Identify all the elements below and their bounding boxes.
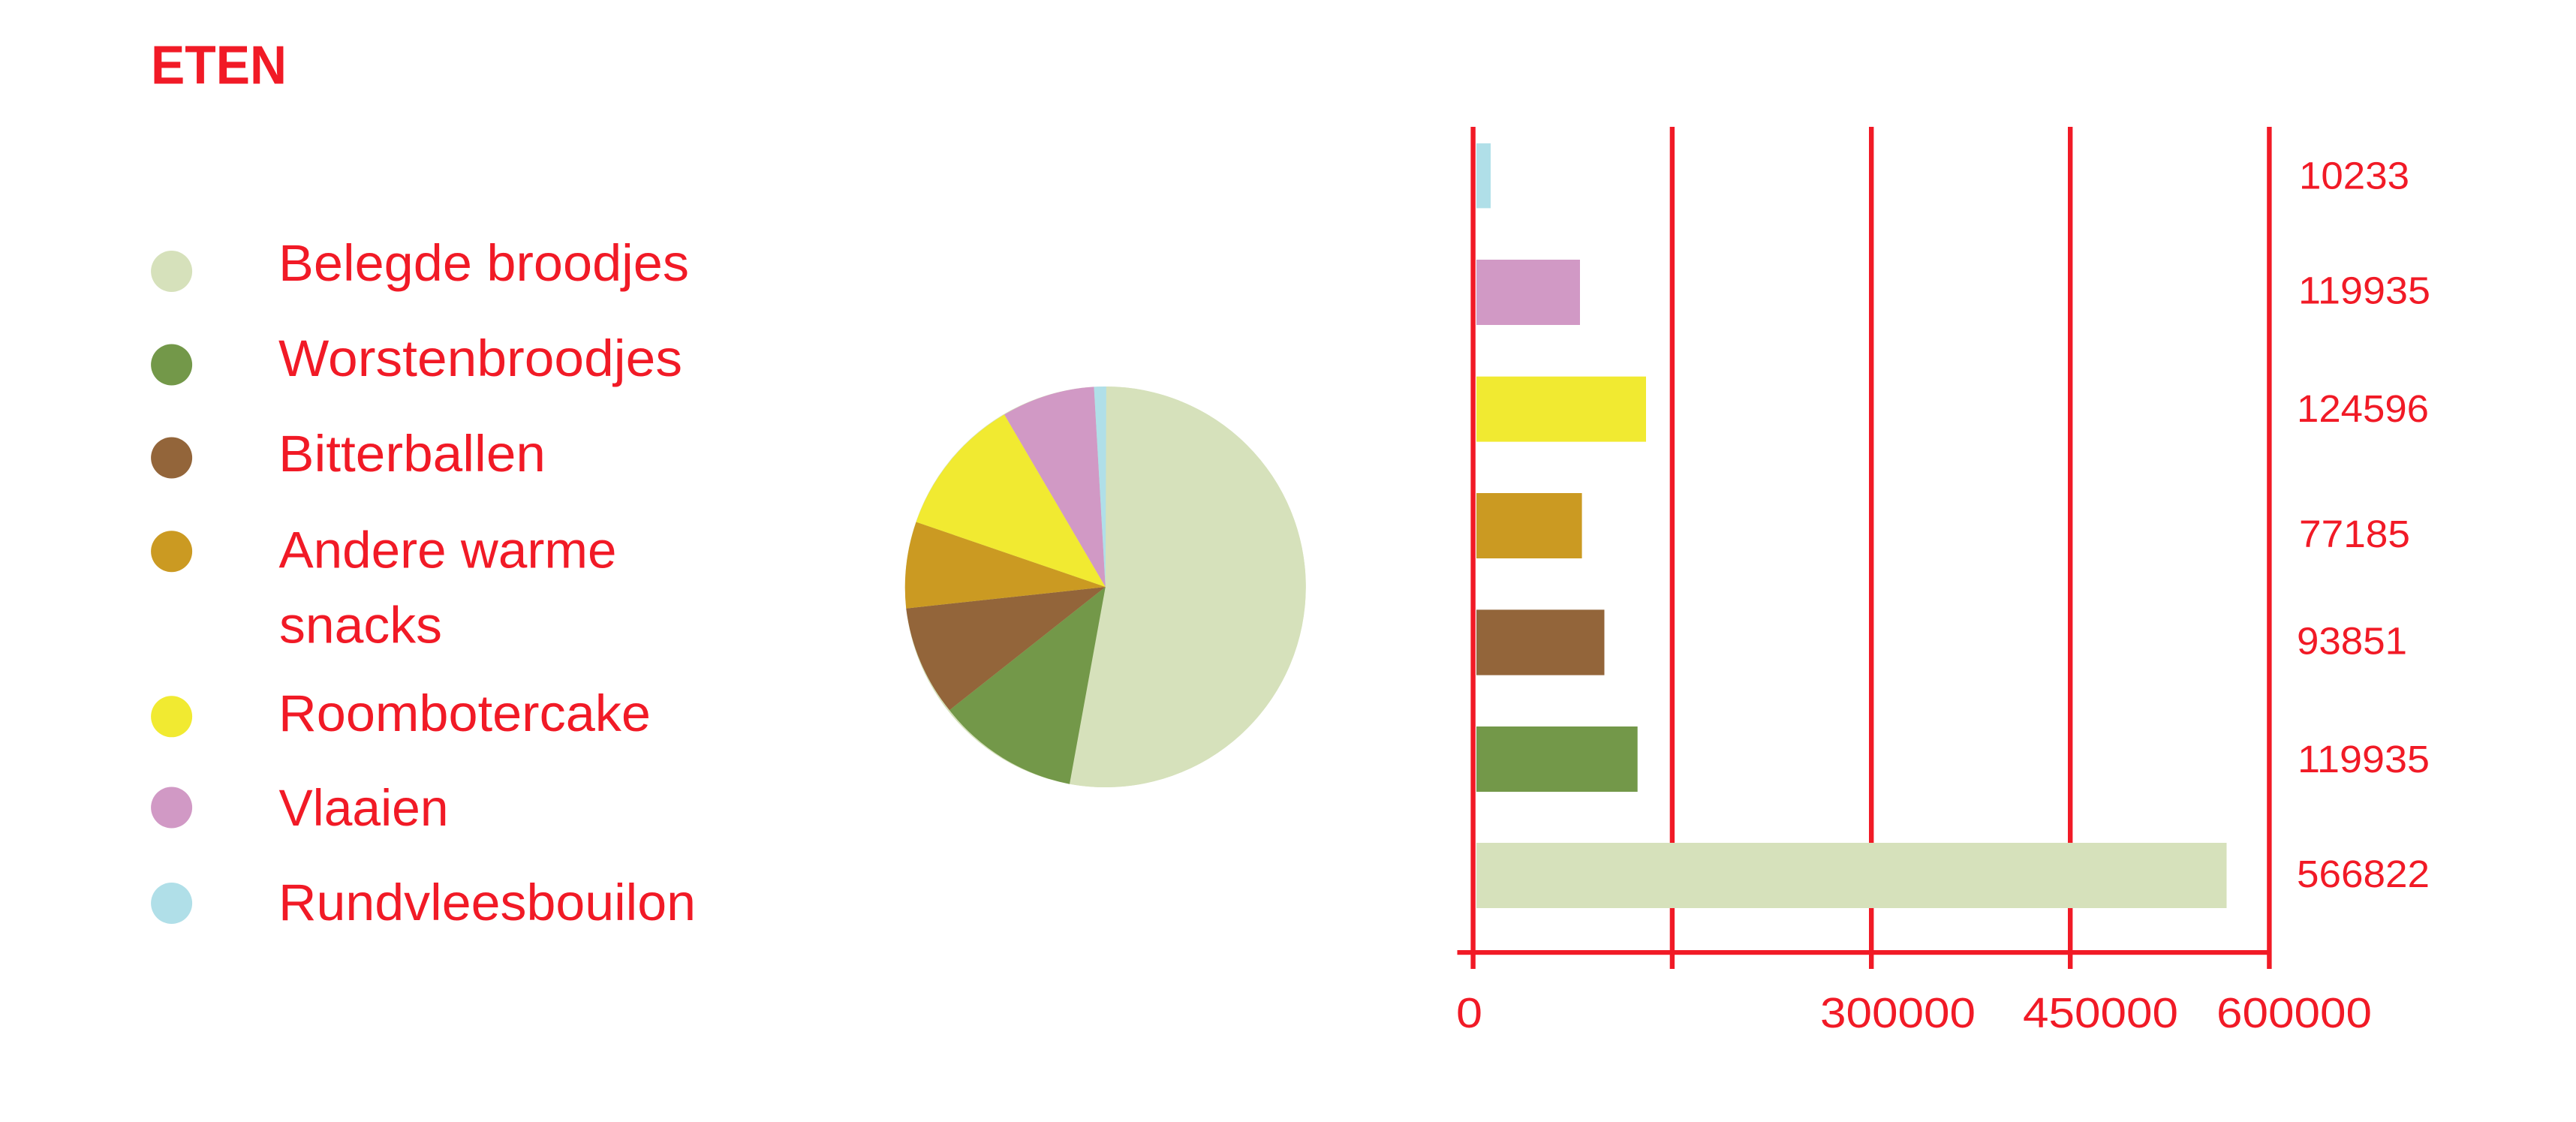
chart grid and axes [1458, 127, 2272, 969]
bar: Rundvleesbouilon [1476, 143, 1491, 208]
bar: Roombotercake [1476, 377, 1646, 442]
legend item: Vlaaien [151, 779, 449, 837]
legend item: Roombotercake: Roombotercake [278, 684, 651, 742]
bar value labels: 10233 [2299, 154, 2409, 197]
x-axis labels: 600000 [2216, 989, 2372, 1037]
bar value labels: 77185 [2299, 513, 2410, 555]
x-axis labels: 300000 [1820, 989, 1976, 1037]
legend item: Bitterballen: Bitterballen [278, 425, 546, 483]
bar value labels: 124596 [2297, 387, 2429, 430]
bar value labels: 566822 [2297, 853, 2430, 895]
legend item: Worstenbroodjes: Worstenbroodjes [278, 329, 682, 387]
bar: Andere warme snacks [1476, 493, 1582, 558]
bar chart [1456, 127, 2430, 1037]
legend item: Vlaaien: Vlaaien [279, 779, 449, 837]
legend item: Andere warme snacks [151, 521, 617, 654]
x-axis labels: 0 [1456, 989, 1482, 1037]
legend item: Andere warme snacks: Andere warme [279, 521, 617, 579]
legend item: Rundvleesbouilon: Rundvleesbouilon [278, 874, 696, 931]
bar: Vlaaien [1476, 260, 1580, 325]
bar: Bitterballen [1476, 609, 1605, 675]
bar value labels: 93851 [2297, 619, 2407, 662]
legend item: Belegde broodjes: Belegde broodjes [278, 234, 689, 292]
bar: Belegde broodjes [1476, 843, 2226, 908]
pie chart [905, 387, 1306, 787]
bar value labels [2297, 154, 2430, 895]
panel: legend [151, 234, 696, 931]
legend item: Bitterballen [151, 425, 546, 483]
bar: Worstenbroodjes [1476, 726, 1638, 792]
bar value labels: 119935 [2298, 269, 2430, 312]
title: ETEN [151, 36, 287, 96]
bar value labels: 119935 [2298, 738, 2430, 781]
x-axis labels: 450000 [2023, 989, 2178, 1037]
legend item: Andere warme snacks: snacks [279, 596, 442, 654]
x-axis labels [1456, 989, 2372, 1037]
